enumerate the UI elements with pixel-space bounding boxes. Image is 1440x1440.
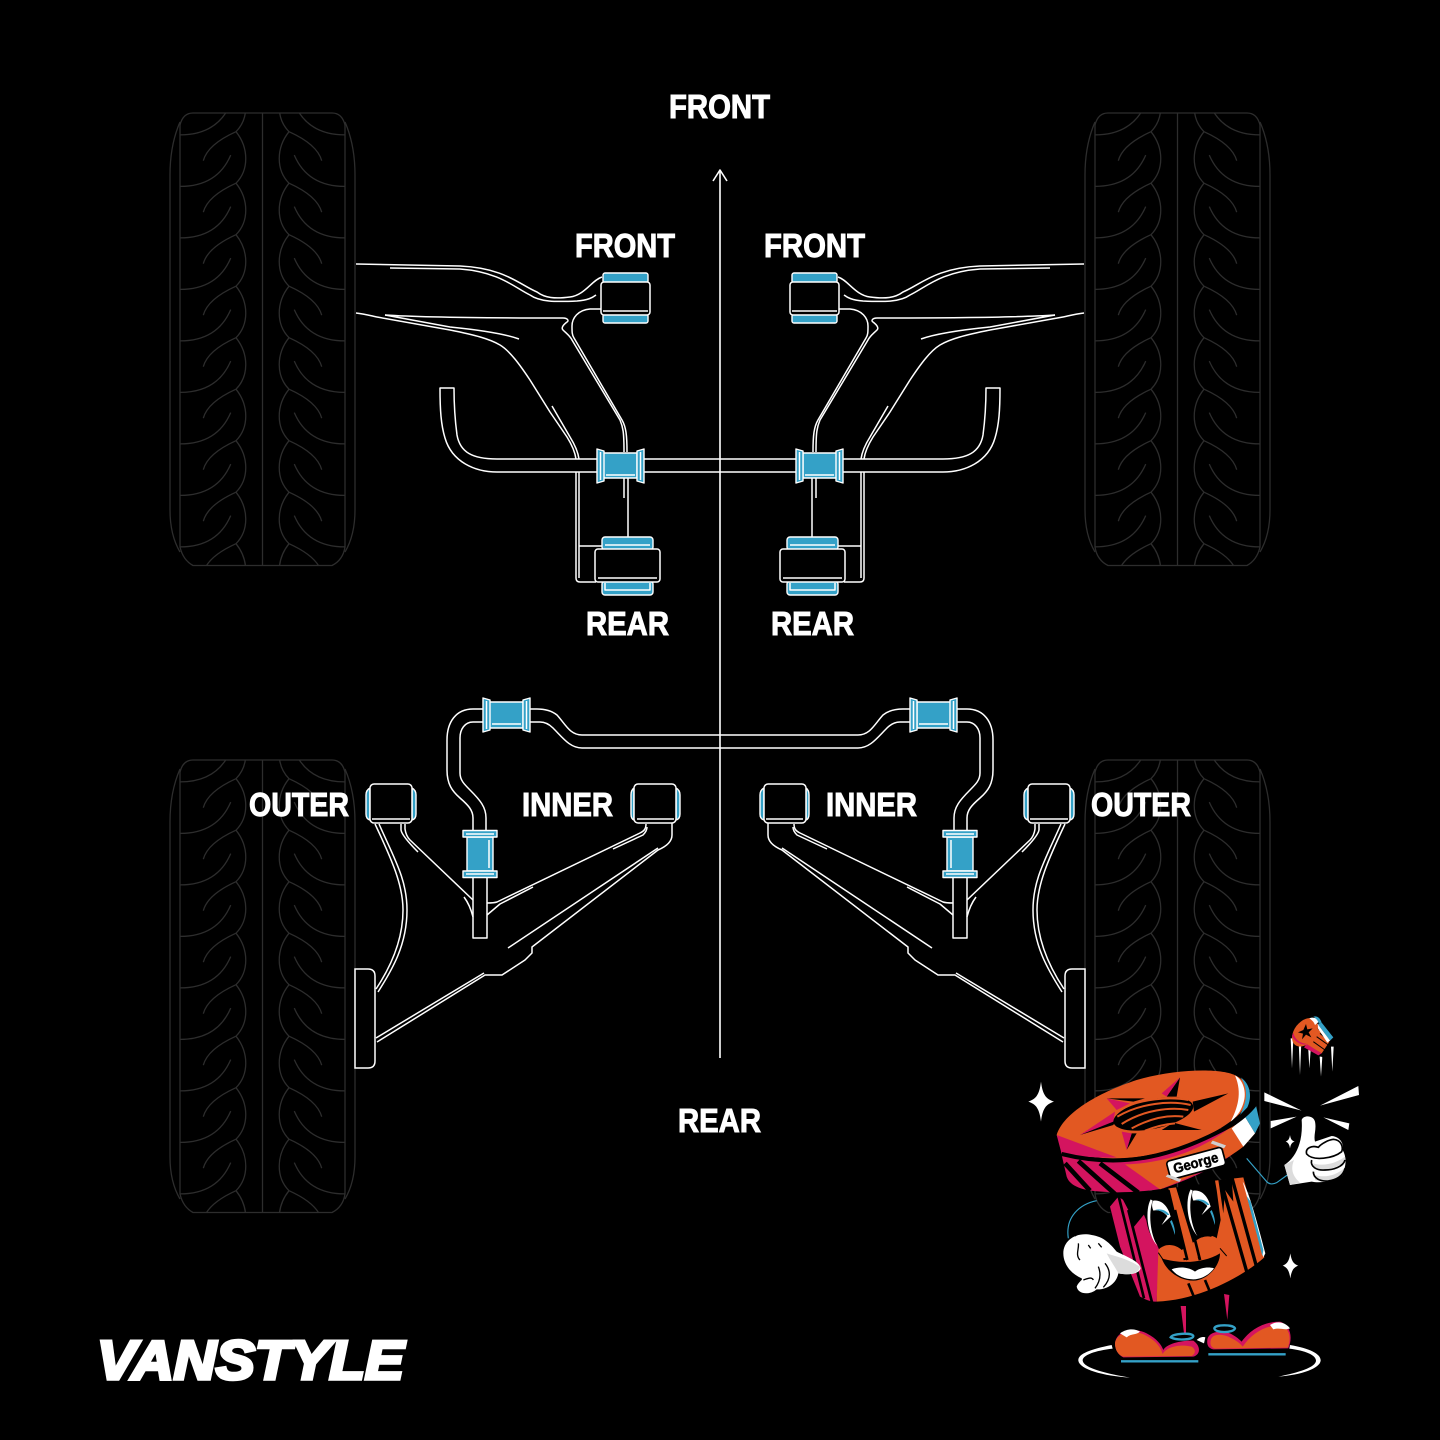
tire: rear left [170, 727, 355, 1242]
rear bushing: OUTER [366, 784, 416, 823]
front control arm [356, 264, 627, 459]
mascot: George the bushing [1028, 1013, 1359, 1378]
label: front left REAR: REAR [586, 605, 669, 642]
cheeks [1158, 1236, 1222, 1260]
label: rear left OUTER: OUTER [249, 786, 349, 823]
legs [1181, 1294, 1229, 1333]
rear anti-roll bar [447, 709, 720, 830]
anti-roll bar bushing [597, 449, 644, 483]
lid star [1080, 1077, 1228, 1150]
left eye [1141, 1193, 1182, 1252]
rear lower control arm [375, 823, 672, 1042]
diagram: rear suspension right [720, 698, 1085, 1068]
thumb rays [1264, 1086, 1359, 1130]
mouth [1162, 1253, 1220, 1281]
front bushing: REAR position [595, 537, 660, 595]
ground ring [1078, 1345, 1321, 1378]
diagram: front suspension right [720, 264, 1084, 595]
teeth [1172, 1268, 1214, 1279]
tire: rear right [1085, 727, 1270, 1242]
flying mini bushing [1287, 1013, 1335, 1077]
label: front right FRONT: FRONT [764, 227, 865, 264]
label: rear right INNER: INNER [826, 786, 917, 823]
heading: FRONT axis: FRONT [669, 88, 770, 125]
arms [1068, 1158, 1287, 1238]
heading: REAR axis: REAR [678, 1102, 761, 1139]
rear drop link bushing: vertical [463, 830, 497, 878]
shoes [1115, 1322, 1291, 1361]
logo: VANSTYLE: VANSTYLE [97, 1329, 406, 1391]
subframe bracket [576, 472, 602, 582]
name tag [1166, 1141, 1226, 1182]
tire: front left [170, 80, 355, 595]
label: front right REAR: REAR [771, 605, 854, 642]
hub carrier [355, 969, 375, 1068]
label: front left FRONT: FRONT [575, 227, 675, 264]
anti-roll bar [440, 388, 720, 472]
drop link [624, 478, 628, 537]
hand: thumbs up [1284, 1116, 1346, 1185]
lid rim [1062, 1104, 1260, 1194]
right eye [1181, 1183, 1222, 1242]
hand: pointing [1063, 1232, 1141, 1293]
lid top [1057, 1070, 1257, 1161]
diagram: front suspension left [356, 264, 720, 595]
rear bushing: INNER [631, 784, 680, 823]
tire: front right [1085, 80, 1270, 595]
thread hole [1111, 1091, 1196, 1137]
label: rear right OUTER: OUTER [1091, 786, 1191, 823]
drop link bar [473, 877, 487, 938]
arrow: front to rear axis [713, 170, 727, 1058]
name tag: George [1171, 1149, 1220, 1176]
front bushing: FRONT position [601, 273, 650, 323]
sparkles [1028, 1082, 1298, 1278]
label: rear left INNER: INNER [522, 786, 613, 823]
rear anti-roll bar bushing: horizontal [483, 698, 530, 732]
body [1108, 1177, 1266, 1302]
diagram: rear suspension left [355, 698, 720, 1068]
